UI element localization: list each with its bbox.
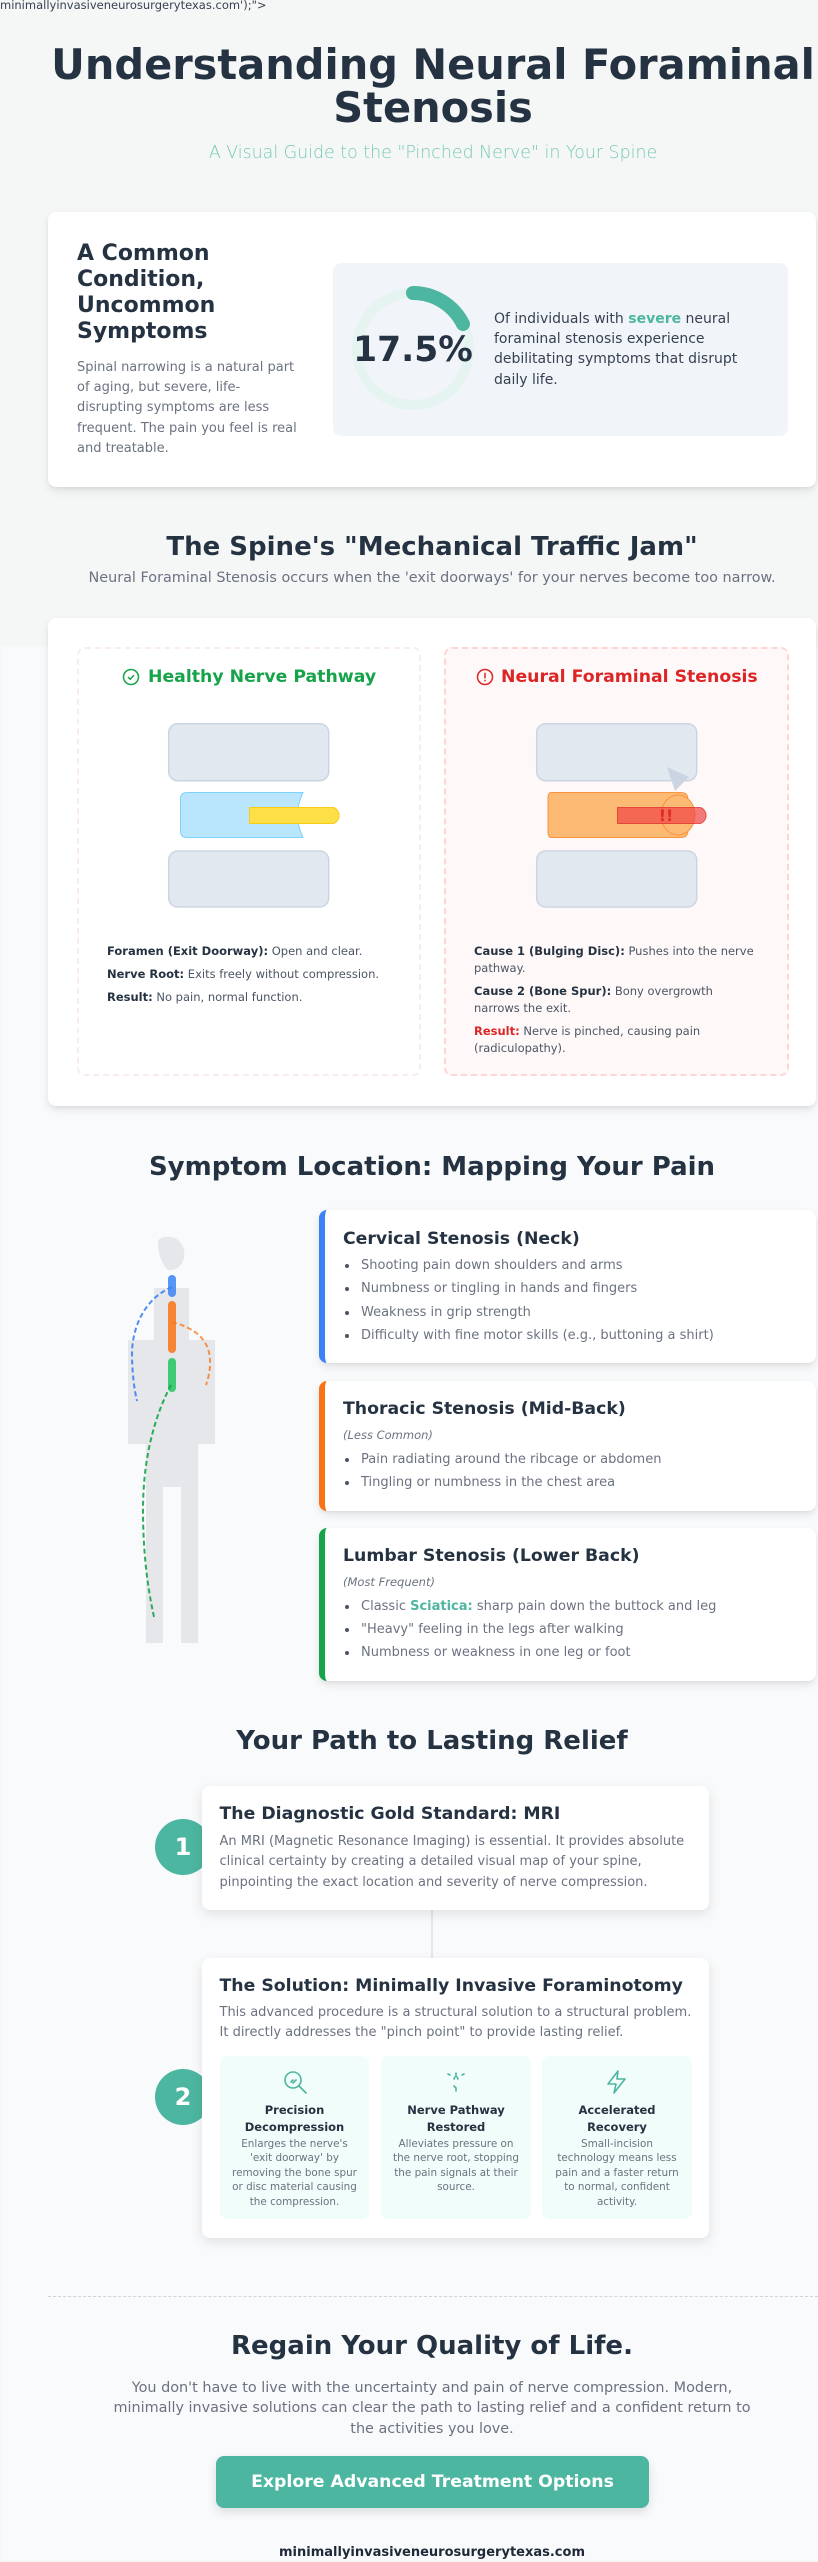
detail: result: (radiculopathy). (474, 1041, 566, 1055)
section subheading: Neural Foraminal Stenosis occurs when the 'exit doorways' for your nerves become too narrow. (88, 570, 776, 586)
closing text: You don't have to live with the uncertainty and pain of nerve compression. Modern, (132, 2380, 732, 2396)
benefit: precision decompression (220, 2056, 369, 2219)
diagram: stenosis spine segment: !! (659, 806, 673, 825)
card text: pinpointing the exact location and severity of nerve compression. (220, 1875, 648, 1890)
icon: magnifier (284, 2071, 307, 2094)
heading: common condition: Uncommon (77, 293, 215, 318)
text: spinal narrowing: disrupting symptoms are less (77, 400, 269, 415)
stat box (333, 263, 788, 436)
benefit text (555, 2138, 679, 2208)
benefit text: Alleviates pressure on (398, 2138, 514, 2150)
heading: common condition: Condition, (77, 267, 204, 292)
benefit text: Small-incision (581, 2138, 653, 2150)
lower page background (2, 646, 818, 2560)
detail: cause 1 (474, 944, 754, 975)
text: spinal narrowing: frequent. The pain you feel is real (77, 421, 297, 436)
frequency note: (Most Frequent) (343, 1575, 435, 1589)
diagram: healthy spine segment (168, 723, 340, 908)
benefit title: Decompression (245, 2120, 344, 2134)
panel: common condition (48, 212, 816, 487)
card text: clinical certainty by creating a detailed visual map of your spine, (220, 1854, 642, 1869)
card text (219, 2005, 691, 2040)
heading: common condition (77, 241, 215, 344)
benefit title: Recovery (587, 2120, 647, 2134)
symptom list: Shooting pain down shoulders and arms (361, 1258, 623, 1273)
diagram: stenosis spine segment (536, 723, 707, 908)
card title: Cervical Stenosis (Neck) (343, 1229, 580, 1249)
detail: cause 2 (474, 984, 713, 1015)
symptom list: Weakness in grip strength (361, 1305, 531, 1320)
card title: Thoracic Stenosis (Mid-Back) (343, 1399, 626, 1419)
detail: cause 1: Cause 1 (Bulging Disc): Pushes into the nerve (474, 944, 754, 958)
symptom list: Classic Sciatica: sharp pain down the buttock and leg (361, 1599, 716, 1614)
detail: cause 1: pathway. (474, 961, 525, 975)
step 1 number: 1 (175, 1833, 191, 1861)
benefit text: pain and a faster return (555, 2167, 679, 2179)
benefit text: activity. (597, 2196, 637, 2208)
stat description: Of individuals with severe neural (494, 311, 730, 327)
benefit: nerve pathway restored (381, 2056, 531, 2219)
heading: common condition: Symptoms (77, 319, 208, 344)
benefit title: Precision (265, 2102, 324, 2116)
detail: result: Result: Nerve is pinched, causing pain (474, 1024, 700, 1038)
detail: result: Result: No pain, normal function. (107, 990, 302, 1004)
step 2 number: 2 (175, 2083, 191, 2111)
panel: healthy pathway (77, 647, 421, 1076)
card text: An MRI (Magnetic Resonance Imaging) is essential. It provides absolute (220, 1834, 684, 1849)
benefit text: removing the bone spur (232, 2167, 357, 2179)
symptom list: Tingling or numbness in the chest area (361, 1475, 615, 1490)
card text (220, 1834, 684, 1890)
detail: nerve root: Nerve Root: Exits freely without compression. (107, 967, 379, 981)
card title: The Solution: Minimally Invasive Foraminotomy (220, 1976, 683, 1996)
text: healthy details (107, 944, 379, 1004)
title: Understanding Neural Foraminal (51, 40, 815, 89)
stat description (494, 311, 737, 388)
benefit text: source. (437, 2181, 475, 2193)
benefit text: 'exit doorway' by (250, 2152, 339, 2164)
card title: The Diagnostic Gold Standard: MRI (220, 1804, 560, 1824)
heading: healthy nerve pathway: Healthy Nerve Pathway (148, 667, 376, 687)
stat description: daily life. (494, 372, 558, 388)
symptom list: "Heavy" feeling in the legs after walking (361, 1622, 624, 1637)
step 1 number (155, 1819, 211, 1875)
card: MRI (202, 1786, 709, 1910)
closing text: minimally invasive solutions can clear the path to lasting relief and a confident return to (113, 2400, 751, 2416)
benefit text: Enlarges the nerve's (241, 2138, 348, 2150)
title: Stenosis (333, 83, 533, 132)
icon: alert circle (476, 668, 494, 686)
text: spinal narrowing: of aging, but severe, life- (77, 380, 240, 395)
benefit: accelerated recovery (542, 2056, 692, 2219)
symptom list (345, 1258, 714, 1343)
card text: This advanced procedure is a structural solution to a structural problem. (220, 2005, 691, 2020)
text: spinal narrowing: Spinal narrowing is a natural part (77, 360, 294, 375)
section heading: path to relief: Your Path to Lasting Relief (236, 1726, 628, 1756)
donut chart 17.5 percent (352, 286, 474, 410)
benefit text: or disc material causing (232, 2181, 357, 2193)
heading: regain quality of life: Regain Your Quality of Life. (231, 2331, 633, 2361)
symptom list (345, 1599, 716, 1660)
benefit text (393, 2138, 519, 2193)
detail: result (474, 1024, 700, 1055)
stat description: debilitating symptoms that disrupt (494, 351, 737, 367)
card: thoracic (319, 1381, 816, 1511)
closing text: the activities you love. (350, 2421, 514, 2437)
detail: cause 2: Cause 2 (Bone Spur): Bony overgrowth (474, 984, 713, 998)
heading: neural foraminal stenosis: Neural Foraminal Stenosis (501, 667, 758, 687)
benefit text: the compression. (250, 2196, 339, 2208)
card: lumbar (319, 1528, 816, 1681)
benefit title (578, 2102, 656, 2134)
footer url: minimallyinvasiveneurosurgerytexas.com (279, 2545, 585, 2560)
frequency note: (Less Common) (343, 1428, 433, 1442)
panel: stenosis (444, 647, 789, 1076)
benefit title (245, 2102, 344, 2134)
closing text (113, 2380, 751, 2437)
detail: foramen: Foramen (Exit Doorway): Open and clear. (107, 944, 362, 958)
benefit title: Restored (427, 2120, 485, 2134)
text: spinal narrowing (77, 360, 297, 456)
benefit text: to normal, confident (564, 2181, 670, 2193)
symptom list: Numbness or tingling in hands and fingers (361, 1281, 637, 1296)
call-to-action button: Explore Advanced Treatment Options (251, 2472, 614, 2492)
benefit title: Accelerated (578, 2102, 656, 2116)
benefit text (232, 2138, 357, 2208)
benefit text: the pain signals at their (394, 2167, 518, 2179)
benefit title: Nerve Pathway (407, 2102, 505, 2116)
title (51, 40, 815, 132)
call-to-action button (216, 2456, 649, 2508)
divider (48, 2296, 818, 2297)
heading: common condition: A Common (77, 241, 210, 266)
text: stenosis details (474, 944, 754, 1055)
card: cervical (319, 1210, 816, 1363)
symptom list: Numbness or weakness in one leg or foot (361, 1645, 631, 1660)
card text: It directly addresses the "pinch point" to provide lasting relief. (220, 2025, 623, 2040)
symptom list (345, 1452, 661, 1490)
benefit title (407, 2102, 505, 2134)
symptom list: Difficulty with fine motor skills (e.g., buttoning a shirt) (361, 1328, 714, 1343)
diagram: body figure with pain paths (128, 1236, 215, 1643)
panel: comparison (48, 618, 816, 1106)
subtitle: A Visual Guide to the "Pinched Nerve" in Your Spine (209, 143, 657, 163)
section heading: symptom location: Symptom Location: Mapping Your Pain (149, 1152, 715, 1182)
icon: check circle (122, 668, 140, 686)
step 2 number (155, 2069, 211, 2125)
icon: sparkle (447, 2072, 465, 2092)
icon: lightning bolt (607, 2070, 626, 2094)
connector line (431, 1905, 433, 1963)
benefit text: the nerve root, stopping (393, 2152, 519, 2164)
text: spinal narrowing: and treatable. (77, 441, 169, 456)
section heading: traffic jam: The Spine's "Mechanical Traffic Jam" (166, 532, 698, 562)
card title: Lumbar Stenosis (Lower Back) (343, 1546, 639, 1566)
symptom list: Pain radiating around the ribcage or abdomen (361, 1452, 661, 1467)
stat number: 17.5% (353, 330, 473, 370)
detail: cause 2: narrows the exit. (474, 1001, 571, 1015)
card: foraminotomy (202, 1958, 709, 2238)
benefit text: technology means less (557, 2152, 677, 2164)
stat description: foraminal stenosis experience (494, 331, 705, 347)
